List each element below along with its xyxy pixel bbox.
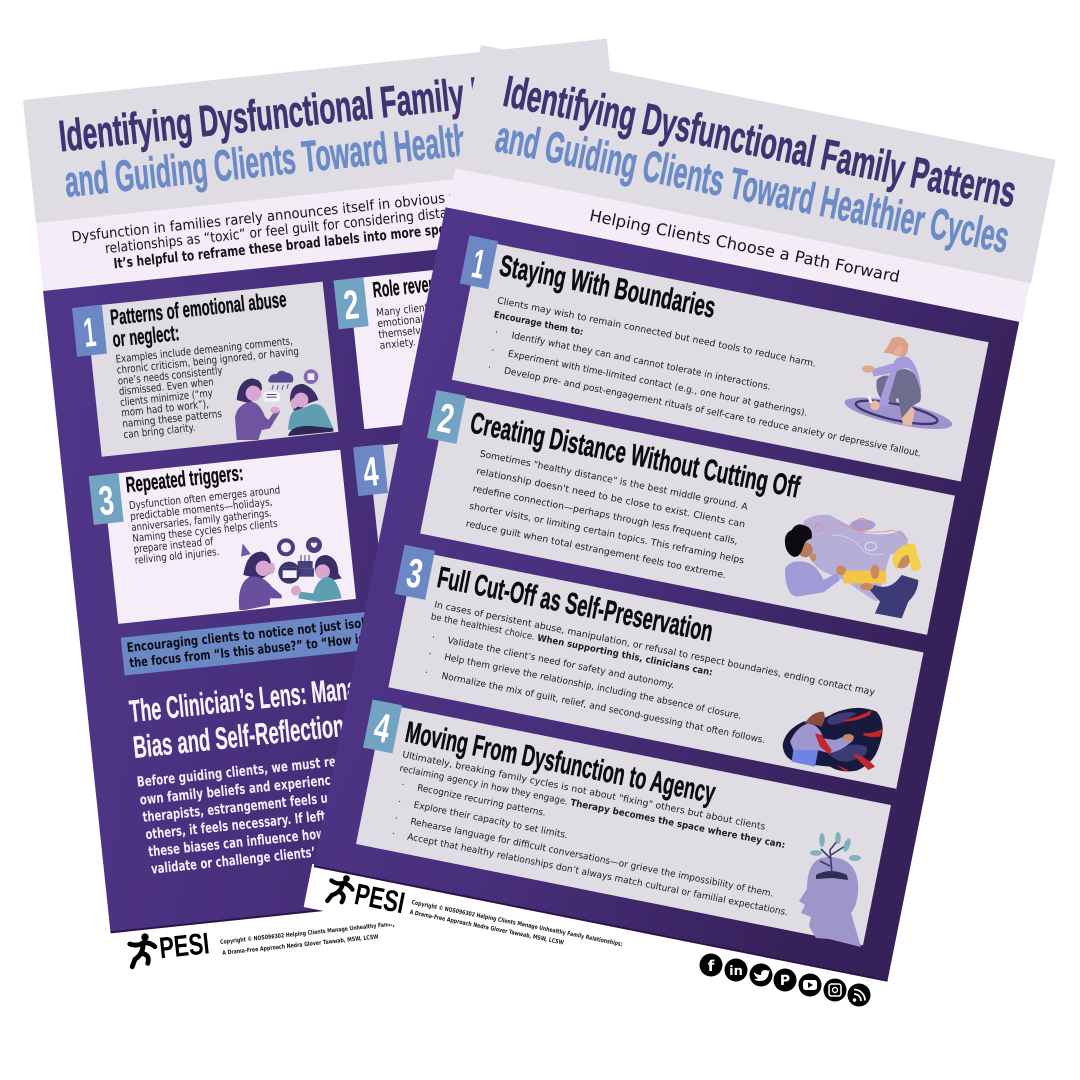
- back copyright: Copyright © NOS096302 Helping Clients Manage Unhealthy Family Relationships:: [220, 917, 434, 946]
- card 1 text: [115, 335, 306, 441]
- card 3 text: ·: [428, 649, 433, 660]
- card 3 text: Validate the client’s need for safety and autonomy.: [447, 635, 675, 691]
- front purple panel: [314, 207, 1019, 981]
- clinician's lens heading: The Clinician’s Lens: Managing: [128, 667, 396, 729]
- clinician's lens text: others, it feels necessary. If left: [145, 808, 327, 843]
- back title: and Guiding Clients Toward Healthier Cycles: [62, 104, 587, 207]
- back sheet: [23, 39, 698, 970]
- subtitle: Helping Clients Choose a Path Forward: [588, 206, 902, 286]
- card 2 text: [376, 292, 521, 352]
- card 4 text: Recognize recurring patterns.: [416, 783, 547, 819]
- card 1 text: ·: [490, 345, 495, 356]
- badge 2: 2: [434, 394, 458, 442]
- illustration: head with tree: [799, 832, 861, 947]
- badge 3: 3: [403, 549, 427, 597]
- back intro panel: [36, 162, 627, 291]
- card 1 text: dismissed. Even when: [118, 376, 214, 398]
- back title: Identifying Dysfunctional Family Patterns: [56, 58, 579, 161]
- illustration: woman with red thread: [783, 708, 883, 772]
- card 2 text: anxiety.: [379, 336, 416, 352]
- front PESI logo: PESI: [352, 878, 407, 920]
- clinician's lens heading: [128, 667, 400, 765]
- card 3 text: reliving old injuries.: [134, 546, 220, 567]
- badge 1: 1: [468, 240, 489, 287]
- card 1 text: naming these patterns: [122, 408, 223, 430]
- front copyright: A Drama-Free Approach Nedra Glover Tawwab, MSW, LCSW: [409, 909, 565, 947]
- card 1 text: chronic criticism, being ignored, or having: [116, 346, 299, 377]
- card 1 heading: or neglect:: [111, 320, 180, 352]
- banner: Encouraging clients to notice not just isolated: [126, 613, 391, 656]
- card 4 text: ·: [394, 813, 399, 825]
- subtitle band: [447, 168, 1030, 322]
- card 2: role reversal: [334, 250, 643, 431]
- front header panel: [456, 45, 1056, 283]
- back intro text: Dysfunction in families rarely announces itself in obvious ways: [71, 187, 483, 246]
- logo figure: [327, 872, 355, 905]
- badge 2: 2: [341, 281, 361, 328]
- card 2: creating distance: [408, 390, 955, 635]
- card 2 heading: Role reversal:: [371, 269, 456, 302]
- card 4 text: ·: [400, 779, 405, 791]
- front PESI logo: [326, 872, 408, 920]
- card 4 text: [386, 749, 805, 918]
- card 4 text: Explore their capacity to set limits.: [413, 800, 569, 841]
- card 1 heading: [109, 287, 290, 352]
- logo figure: [129, 933, 157, 967]
- card 1 text: Identify what they can and cannot tolerate in interactions.: [511, 330, 772, 393]
- clinician's lens text: own family beliefs and experiences: [139, 771, 345, 809]
- front copyright: Copyright © NOS096302 Helping Clients Manage Unhealthy Family Relationships:: [411, 899, 623, 948]
- card 1 text: [482, 295, 935, 460]
- card 1: patterns of emotional abuse: [72, 282, 338, 458]
- clinician's lens text: these biases can influence how: [148, 826, 326, 860]
- card 4: moving from dysfunction: [344, 699, 891, 945]
- card 1: staying with boundaries: [441, 235, 989, 481]
- card 4: [353, 417, 660, 598]
- card 3 text: anniversaries, family gatherings.: [131, 507, 272, 534]
- social icons: in: [729, 964, 743, 979]
- card 3: repeated triggers: [89, 450, 356, 625]
- back intro text: relationships as “toxic” or feel guilt for considering distance: [104, 203, 470, 257]
- card 1 text: Clients may wish to remain connected but need tools to reduce harm.: [496, 295, 817, 370]
- badge 1: [72, 305, 107, 357]
- card 2 text: shorter visits, or limiting certain topics. This reframing helps: [468, 501, 745, 566]
- social icons: P: [780, 973, 790, 989]
- card 1 text: ·: [487, 362, 492, 374]
- back copyright: A Drama-Free Approach Nedra Glover Tawwab, MSW, LCSW: [222, 933, 379, 957]
- card 3 text: prepare instead of: [133, 536, 214, 556]
- clinician's lens heading: Bias and Self-Reflection: [131, 708, 346, 765]
- back PESI logo: PESI: [158, 927, 211, 965]
- card 3 text: predictable moments—holidays,: [130, 496, 273, 523]
- card 4 text: Accept that healthy relationships don’t always match cultural or familial expectations.: [406, 832, 789, 918]
- card 2 text: Sometimes "healthy distance" is the best middle ground. A: [479, 449, 749, 513]
- card 1 heading: Patterns of emotional abuse: [109, 287, 288, 330]
- card 4 heading: Moving From Dysfunction to Agency: [403, 716, 718, 810]
- card 2 text: redefine connection—perhaps through less frequent calls,: [472, 483, 739, 547]
- card 1 text: one’s needs consistently: [117, 365, 223, 388]
- banner: [121, 581, 662, 676]
- card 3 text: ·: [424, 667, 429, 679]
- card 1 heading: Staying With Boundaries: [497, 249, 718, 325]
- card 1 text: Develop pre- and post-engagement rituals of self-care to reduce anxiety or depressive fallout.: [503, 365, 922, 460]
- card 4 text: ·: [397, 797, 402, 808]
- card 1 text: can bring clarity.: [123, 422, 196, 441]
- card 3 text: [128, 484, 287, 567]
- footer base: [304, 864, 893, 1023]
- card 1 text: Experiment with time-limited contact (e.g., one hour at gatherings).: [507, 348, 808, 419]
- card 3 text: ·: [431, 632, 436, 643]
- card 1 text: Examples include demeaning comments,: [115, 335, 293, 366]
- card 4 text: Ultimately, breaking family cycles is not about "fixing" others but about clients: [401, 749, 766, 833]
- card 1 text: Encourage them to:: [493, 309, 584, 338]
- badge 4: 4: [370, 704, 394, 752]
- card 4 text: ·: [391, 828, 396, 840]
- card 3 heading: Full Cut-Off as Self-Preservation: [435, 561, 716, 648]
- badge 4: 4: [361, 448, 381, 495]
- card 3 text: Help them grieve the relationship, including the absence of closure.: [443, 652, 743, 722]
- card 3 text: Normalize the mix of guilt, relief, and second-guessing that often follows.: [441, 671, 766, 746]
- card 2 text: themselves, often with chronic: [378, 314, 520, 341]
- card 2 text: [465, 449, 756, 584]
- badge 1: 1: [81, 309, 98, 356]
- back purple panel: [43, 230, 694, 932]
- clinician's lens text: Before guiding clients, we must re: [136, 754, 337, 791]
- card 4 text: reclaiming agency in how they engage. Therapy becomes the space where they can:: [399, 763, 786, 851]
- clinician's lens text: validate or challenge clients’: [150, 845, 316, 878]
- card 2 text: Many clients describe being an: [376, 293, 517, 319]
- illustration: two women, anniversaries: [239, 537, 342, 610]
- card 3 text: In cases of persistent abuse, manipulation, or refusal to respect boundaries, ending contact may: [433, 599, 876, 698]
- illustration: seated woman on disc: [842, 337, 954, 436]
- card 2 text: relationship doesn't need to be close to exist. Clients can: [475, 466, 746, 530]
- card 3 text: [419, 599, 876, 765]
- card 4 text: Rehearse language for difficult conversations—or grieve the impossibility of them.: [409, 816, 774, 900]
- back PESI logo: [129, 927, 211, 968]
- card 3 heading: Repeated triggers:: [124, 460, 244, 497]
- front sheet: [304, 44, 1057, 1023]
- back title: [56, 58, 587, 207]
- card 1 text: ·: [494, 327, 499, 338]
- card 3 text: be the healthiest choice. When supporting this, clinicians can:: [430, 611, 714, 678]
- card 3 text: Naming these cycles helps clients: [132, 518, 278, 545]
- card 2 text: emotional parent to parents or: [377, 303, 519, 330]
- card 1 text: mom had to work”),: [121, 398, 209, 419]
- illustration: two women, criticism: [235, 369, 333, 440]
- badge 3: 3: [96, 477, 116, 524]
- card 3: full cut-off: [377, 545, 924, 789]
- back copyright: [220, 917, 435, 957]
- card 2 heading: Creating Distance Without Cutting Off: [468, 407, 803, 505]
- card 2 text: reduce guilt when total estrangement feels too extreme.: [465, 518, 727, 581]
- illustration: two people with ruler: [785, 515, 922, 618]
- social icons: f: [708, 957, 715, 975]
- back intro text: It’s helpful to reframe these broad labels into more specific: [113, 219, 471, 272]
- card 3 text: Dysfunction often emerges around: [128, 484, 281, 512]
- badge 1: [460, 235, 498, 289]
- back intro text: [71, 187, 486, 276]
- clinician's lens text: [136, 753, 352, 878]
- clinician's lens text: therapists, estrangement feels u: [142, 791, 329, 826]
- social icons: [700, 954, 870, 1006]
- back header panel: [23, 39, 620, 223]
- card 1 text: clients minimize (“my: [120, 387, 213, 409]
- banner: the focus from “Is this abuse?” to “How is: [129, 632, 365, 671]
